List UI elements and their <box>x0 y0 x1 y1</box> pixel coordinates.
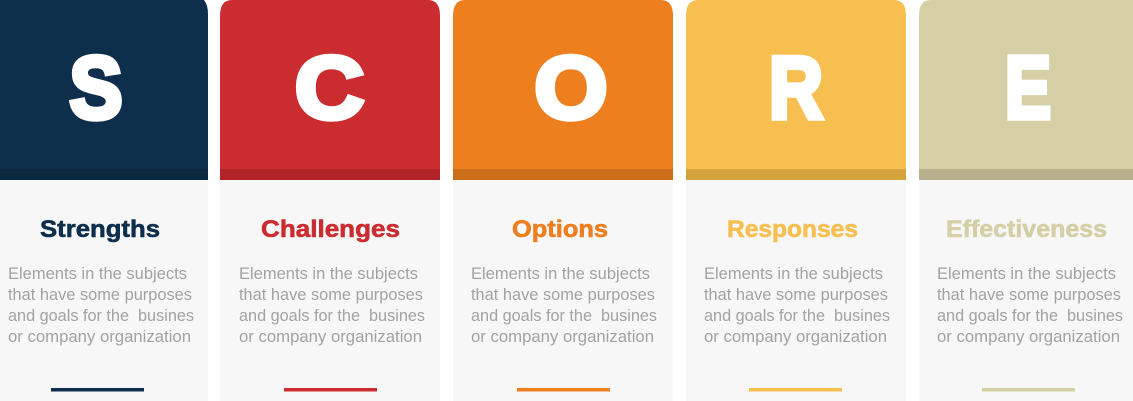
accent line <box>517 388 610 392</box>
body text <box>704 264 890 346</box>
heading: Options: Options <box>512 216 608 243</box>
letter E: E <box>1005 38 1051 137</box>
body text: and goals for the busines <box>8 306 194 325</box>
panel: Challenges <box>220 0 440 401</box>
body text: and goals for the busines <box>937 306 1123 325</box>
body text: or company organization <box>8 327 191 346</box>
body text: that have some purposes <box>239 285 423 304</box>
body text: and goals for the busines <box>471 306 657 325</box>
accent line <box>284 388 377 392</box>
panel: Strengths <box>0 0 208 401</box>
body text <box>239 264 425 346</box>
letter S: S <box>70 38 122 137</box>
header block: E <box>919 0 1133 180</box>
header block: C <box>220 0 440 180</box>
body text: and goals for the busines <box>239 306 425 325</box>
heading: Effectiveness: Effectiveness <box>946 216 1107 243</box>
body text: that have some purposes <box>8 285 192 304</box>
header block: S <box>0 0 208 180</box>
body text: or company organization <box>937 327 1120 346</box>
accent line <box>51 388 144 392</box>
body text: or company organization <box>239 327 422 346</box>
body text <box>471 264 657 346</box>
body text: that have some purposes <box>471 285 655 304</box>
header block: O <box>453 0 673 180</box>
body text <box>937 264 1123 346</box>
body text: that have some purposes <box>937 285 1121 304</box>
body text: Elements in the subjects <box>471 264 650 283</box>
body text: Elements in the subjects <box>8 264 187 283</box>
body text: that have some purposes <box>704 285 888 304</box>
body text: Elements in the subjects <box>937 264 1116 283</box>
body text: Elements in the subjects <box>239 264 418 283</box>
body text: or company organization <box>471 327 654 346</box>
panel: Responses <box>686 0 906 401</box>
letter C: C <box>295 38 364 137</box>
panel: Effectiveness <box>919 0 1133 401</box>
accent line <box>749 388 842 392</box>
heading: Responses: Responses <box>727 216 858 243</box>
body text <box>8 264 194 346</box>
header block: R <box>686 0 906 180</box>
body text: Elements in the subjects <box>704 264 883 283</box>
accent line <box>982 388 1075 392</box>
letter O: O <box>534 38 608 137</box>
body text: or company organization <box>704 327 887 346</box>
body text: and goals for the busines <box>704 306 890 325</box>
heading: Challenges: Challenges <box>261 216 400 243</box>
heading: Strengths: Strengths <box>40 216 160 243</box>
letter R: R <box>769 38 823 137</box>
panel: Options <box>453 0 673 401</box>
